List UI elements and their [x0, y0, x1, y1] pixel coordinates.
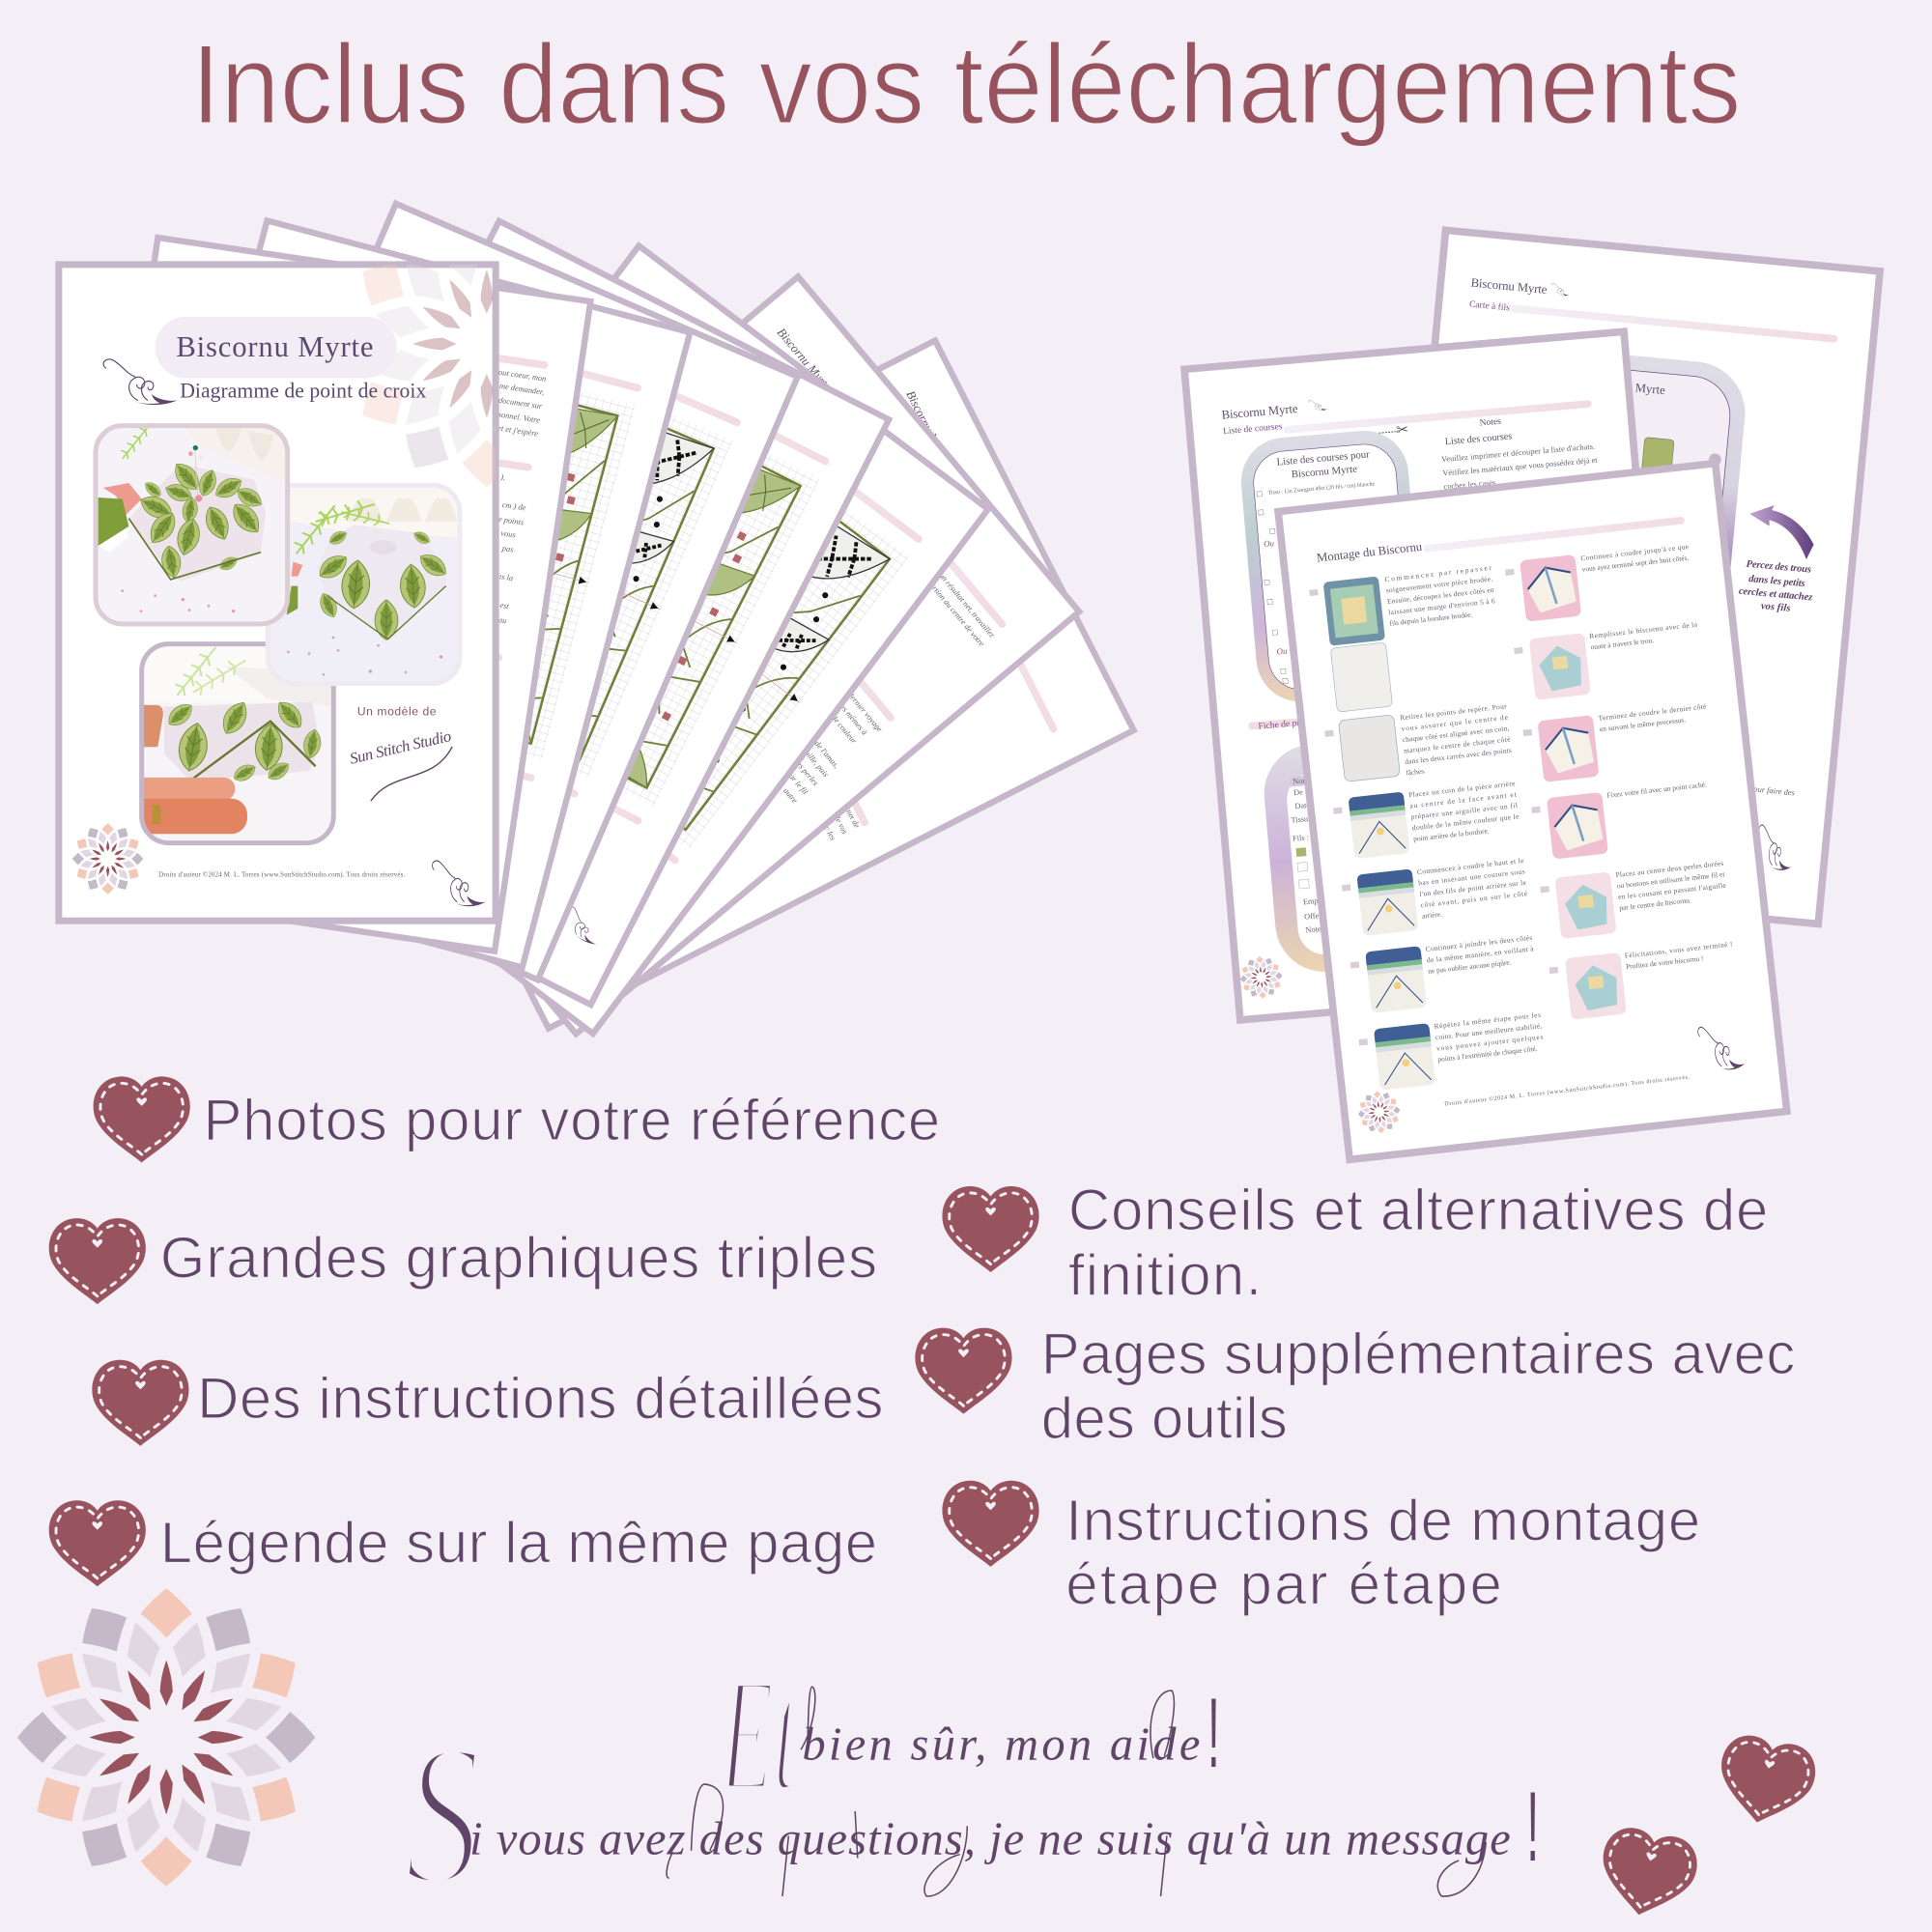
- feature: extra pages: Pages supplémentaires avec: [1041, 1321, 1795, 1386]
- step 4: Commencez à coudre le haut et le: [1416, 856, 1524, 876]
- subheading: Liste de courses: [1223, 421, 1283, 437]
- step 2: [1323, 701, 1514, 785]
- designer credit label: Un modèle de: [357, 705, 437, 719]
- project form card: Fils :: [1293, 833, 1309, 843]
- page swirl: [1697, 1023, 1745, 1073]
- page 4: colour chart: [201, 221, 889, 1005]
- step 12: [1548, 940, 1739, 1022]
- page copyright: Droits d'auteur ©2024 M. L. Torres (www.SunStitchStudio.com). Tous droits réservés.: [1444, 1074, 1690, 1108]
- step 1: fils depuis la bordure brodée.: [1389, 610, 1473, 628]
- step 8: Remplissez le biscornu avec de la: [1589, 620, 1698, 640]
- feature: photos: Photos pour votre référence: [203, 1088, 940, 1152]
- page 3: symbol chart: [136, 204, 798, 980]
- heart bullet 1: [94, 1076, 190, 1162]
- step 7: [1504, 542, 1695, 623]
- step 7: Continuez à coudre jusqu'à ce que: [1580, 542, 1690, 562]
- cover swirl ornament: [103, 359, 178, 405]
- script note: vos fils: [1760, 601, 1791, 614]
- page 1: introduction text page: projet et j'espère: [483, 421, 539, 439]
- step 11: [1539, 859, 1730, 941]
- step 9: [1522, 701, 1714, 784]
- cover subtitle: Diagramme de point de croix: [180, 379, 426, 402]
- page 7: back text page: Biscornu Myrte: [903, 388, 951, 464]
- notes text: cochez les cases: [1443, 478, 1496, 491]
- step 6: Répétez la même étape pour les: [1434, 1010, 1541, 1031]
- form label: Fiche de projet: [1258, 717, 1314, 732]
- step 6: coins. Pour une meilleure stabilité,: [1435, 1021, 1543, 1041]
- heart bullet 5: [942, 1186, 1039, 1272]
- page 6: text page: les mêmes à: [837, 701, 868, 737]
- heart bullet 7: [942, 1481, 1039, 1567]
- step 4: [1341, 856, 1531, 938]
- project form card: Offert à: [1304, 910, 1330, 922]
- script message: [404, 1645, 1539, 1927]
- page 6: text page: aiguille, puis: [796, 741, 831, 780]
- page 2: colour chart: [99, 220, 690, 967]
- photo 1: biscornu top view: [94, 422, 290, 626]
- title: Inclus dans vos téléchargements: [191, 21, 1741, 148]
- curved arrow: [1749, 505, 1814, 559]
- shopping list card: Ou: [1276, 646, 1288, 657]
- step 11: ou boutons en utilisant le même fil et: [1616, 869, 1725, 891]
- step 4: bas en insérant une couture sous: [1418, 867, 1525, 888]
- feature list right: [915, 1178, 1795, 1617]
- project form card: Emplacement: [1303, 894, 1348, 906]
- cover mandala logo: [72, 823, 143, 895]
- page 1: introduction text page: dans la: [489, 571, 514, 582]
- step 5: ne pas oublier aucune piqûre.: [1428, 957, 1512, 976]
- project form card: Notes: [1305, 924, 1324, 935]
- step 11: en les cousant en passant l'aiguille: [1618, 881, 1727, 901]
- page 1: introduction text page: cm ) de: [501, 500, 526, 512]
- page 6: text page: dernier voyage: [846, 691, 884, 734]
- cover title: Biscornu Myrte: [176, 330, 373, 363]
- step 2: marquez le centre de chaque côté: [1404, 734, 1512, 755]
- shopping list card: Biscornu Myrte: [1291, 464, 1358, 480]
- page 1: introduction text page: [62, 238, 590, 952]
- feature: finishing tips: finition.: [1068, 1243, 1262, 1308]
- step 6: vous pouvez ajouter quelques: [1436, 1033, 1544, 1053]
- page 1: introduction text page: ce document sur: [489, 394, 544, 411]
- notes text: Notes: [1479, 416, 1502, 429]
- pink divider bar: [1510, 304, 1838, 343]
- script line 1: Et: [720, 1645, 799, 1825]
- feature: assembly: [1065, 1488, 1700, 1617]
- page 1: introduction text page: cm ).: [489, 471, 506, 482]
- trailing note text: pour faire des: [1748, 784, 1796, 797]
- heart bullet 3: [92, 1360, 188, 1446]
- page 1: introduction text page: de points: [494, 514, 525, 527]
- page 1: introduction text page: pas: [500, 544, 515, 554]
- step 8: ouate à travers le trou.: [1590, 636, 1655, 651]
- page 6: text page: par le fil: [784, 768, 810, 797]
- step 12: Profitez de votre biscornu !: [1626, 953, 1704, 971]
- project form card: Tissu: [1291, 814, 1308, 825]
- feature list left: [49, 1076, 940, 1586]
- page 5: symbol chart: [243, 245, 988, 1034]
- heart decoration upper: [1711, 1730, 1821, 1833]
- small mandala: [1355, 1089, 1403, 1135]
- step 9: en suivant le même processus.: [1599, 715, 1687, 733]
- script line 2: [404, 1701, 1539, 1927]
- heart bullet 2: [49, 1218, 146, 1304]
- page 6: text page: les perles: [793, 758, 820, 788]
- step 2: chaque côté est aligné avec un coin,: [1402, 724, 1510, 744]
- step 2: Retirez les points de repère. Pour: [1400, 701, 1508, 722]
- feature: assembly: étape par étape: [1065, 1552, 1502, 1617]
- script line 2: S: [404, 1701, 480, 1927]
- step 2: vous assurer que le centre de: [1401, 713, 1509, 733]
- page 6: text page: un résultat net, travaillez: [937, 571, 997, 639]
- step 3: au centre de la face avant et: [1409, 790, 1517, 810]
- page 7: back text page: les travaux de: [833, 784, 862, 830]
- step 12: Félicitations, vous avez terminé !: [1624, 940, 1733, 960]
- script note: cercles et attachez: [1738, 586, 1814, 604]
- step 9: Terminez de coudre le dernier côté: [1598, 701, 1707, 723]
- step 8: [1513, 620, 1704, 702]
- project form card: Nom: [1293, 776, 1310, 786]
- step 3: [1332, 779, 1522, 861]
- page 6: text page: [295, 276, 1079, 1034]
- step 7: vous ayez terminé sept des huit côtés.: [1581, 554, 1690, 574]
- page swirl: [1551, 283, 1571, 297]
- feature: assembly: Instructions de montage: [1065, 1488, 1700, 1552]
- dashed cut line with scissors: ✂: [1396, 420, 1409, 440]
- pink divider bar: [1283, 400, 1592, 434]
- step 11: par le centre du biscornu.: [1619, 895, 1691, 912]
- script line 1: bien sûr, mon aide: [802, 1719, 1200, 1770]
- page 7: back text page: de vos: [832, 813, 849, 837]
- large mandala: [17, 1588, 315, 1887]
- shopping list card: Liste des courses pour: [1276, 448, 1371, 469]
- step 11: Placez au centre deux perles dorées: [1615, 859, 1724, 879]
- script line 1: [720, 1645, 1220, 1825]
- shopping list card: [1237, 427, 1427, 705]
- cover swirl bottom: [432, 861, 486, 906]
- notes text: [1438, 408, 1600, 491]
- cover title pill: [156, 317, 397, 379]
- heart decoration lower: [1593, 1823, 1702, 1924]
- faded mandala on cover: [363, 265, 496, 487]
- script note: Percez des trous: [1746, 559, 1811, 576]
- feature: instructions: Des instructions détaillées: [197, 1366, 884, 1431]
- fanned stack of chart and instruction pages: [62, 204, 1134, 1034]
- thread card: [1431, 340, 1749, 772]
- page heading: Biscornu Myrte: [1470, 276, 1548, 297]
- step 3: double de la même couleur que le: [1411, 811, 1520, 832]
- dashed cut line with scissors: [1360, 420, 1409, 442]
- step 3: préparez une aiguille avec un fil: [1410, 801, 1518, 821]
- page 1: introduction text page: pas à me demander,: [479, 379, 545, 397]
- right stack: shopping list page: [1184, 331, 1680, 1020]
- step 10: [1530, 780, 1713, 861]
- page 6: text page: Biscornu Myrte: [775, 326, 835, 393]
- step 2: lâches.: [1406, 766, 1426, 777]
- feature: finishing tips: [1068, 1178, 1768, 1308]
- heart bullet 4: [49, 1500, 146, 1586]
- step 6: [1357, 1010, 1548, 1093]
- page 1: introduction text page: est: [499, 601, 510, 611]
- project form card: [1261, 734, 1452, 976]
- feature: extra pages: [1041, 1321, 1795, 1451]
- step 6: points à l'extrémité de chaque côté.: [1437, 1044, 1538, 1064]
- feature: legend: Légende sur la même page: [160, 1510, 877, 1575]
- page 1: introduction text page: personnel. Votre: [486, 409, 541, 425]
- photo 2: biscornu back view: [266, 481, 462, 686]
- feature: finishing tips: Conseils et alternatives de: [1068, 1178, 1768, 1242]
- thread card: Biscornu Myrte: [1587, 377, 1666, 397]
- page swirl: [1308, 399, 1327, 412]
- notes text: Veuillez imprimer et découper la liste d'achats.: [1441, 442, 1595, 464]
- page heading: Montage du Biscornu: [1316, 540, 1423, 565]
- step 4: côté avant, puis un sur le côté: [1420, 889, 1528, 909]
- step 10: Fixez votre fil avec un point caché.: [1606, 780, 1707, 800]
- right stack: thread card page: [1384, 230, 1880, 923]
- shopping list card: Tissu : Lin Zweigart 49ct (20 fils / cm) blanche: [1267, 480, 1376, 497]
- feature: extra pages: des outils: [1041, 1386, 1288, 1451]
- step 2: dans les deux carrés avec des points: [1405, 746, 1512, 766]
- small mandala: [1238, 954, 1284, 1000]
- page 6: text page: de l'amas,: [812, 739, 840, 770]
- step 5: de la même manière, en veillant à: [1427, 944, 1535, 964]
- cover page: [59, 201, 630, 921]
- step 4: l'un des fils de point arrière sur le: [1419, 878, 1527, 898]
- subheading: Carte à fils: [1469, 299, 1511, 313]
- page heading: Biscornu Myrte: [1221, 402, 1298, 422]
- pink divider bar: [1423, 517, 1685, 553]
- page 7: back text page: [350, 341, 1134, 1029]
- shopping list card: Ou: [1264, 538, 1275, 549]
- project form card: De: [1293, 787, 1304, 797]
- right stack: assembly instructions page: [1277, 453, 1793, 1159]
- page swirl: [1755, 825, 1795, 871]
- script message: !: [1208, 1678, 1220, 1788]
- designer signature: Sun Stitch Studio: [348, 726, 453, 768]
- cover copyright: Droits d'auteur ©2024 M. L. Torres (www.SunStitchStudio.com). Tous droits réservés.: [158, 872, 406, 879]
- project form card: Date: [1294, 801, 1311, 810]
- photo 3: hand holding biscornu: [132, 641, 336, 845]
- page 6: text page: ) de couleur: [826, 709, 859, 746]
- page 1: introduction text page: fil, vous: [490, 527, 517, 540]
- heart bullet 6: [915, 1328, 1012, 1414]
- step 5: Continuez à joindre les deux côtés: [1425, 933, 1533, 953]
- page 1: introduction text page: au: [497, 615, 507, 625]
- script note: [1738, 559, 1814, 614]
- step 1: Commencez par repasser: [1384, 563, 1492, 583]
- step 3: point arrière de la bordure.: [1413, 826, 1490, 843]
- notes text: Liste des courses: [1444, 431, 1513, 447]
- step 1: [1308, 563, 1506, 714]
- script line 2: i vous avez des questions, je ne suis qu'à un message: [469, 1814, 1511, 1865]
- page 6: text page: autre: [781, 786, 799, 805]
- designer signature: [348, 726, 453, 801]
- cover photographs: [94, 422, 462, 845]
- step 3: Placez un coin de la pièce arrière: [1408, 779, 1517, 799]
- form label: [1248, 715, 1335, 733]
- feature: charts: Grandes graphiques triples: [160, 1226, 877, 1291]
- page 6: text page: insertion au centre de votre: [922, 574, 986, 648]
- page 1: introduction text page: de tout coeur, mon: [486, 366, 547, 384]
- script note: dans les petits: [1748, 574, 1805, 589]
- infographic canvas: !: [1526, 1772, 1539, 1882]
- step 1: laissant une marge d'environ 5 à 6: [1388, 596, 1495, 616]
- page 7: back text page: avec les: [817, 814, 838, 842]
- step 1: soigneusement votre pièce brodée.: [1385, 574, 1493, 595]
- step 5: [1350, 933, 1539, 1015]
- notes text: Vérifiez les matériaux que vous possédez déjà et: [1442, 456, 1599, 478]
- step 4: arrière.: [1421, 909, 1443, 921]
- step 1: Ensuite, découpez les deux côtés en: [1387, 585, 1494, 606]
